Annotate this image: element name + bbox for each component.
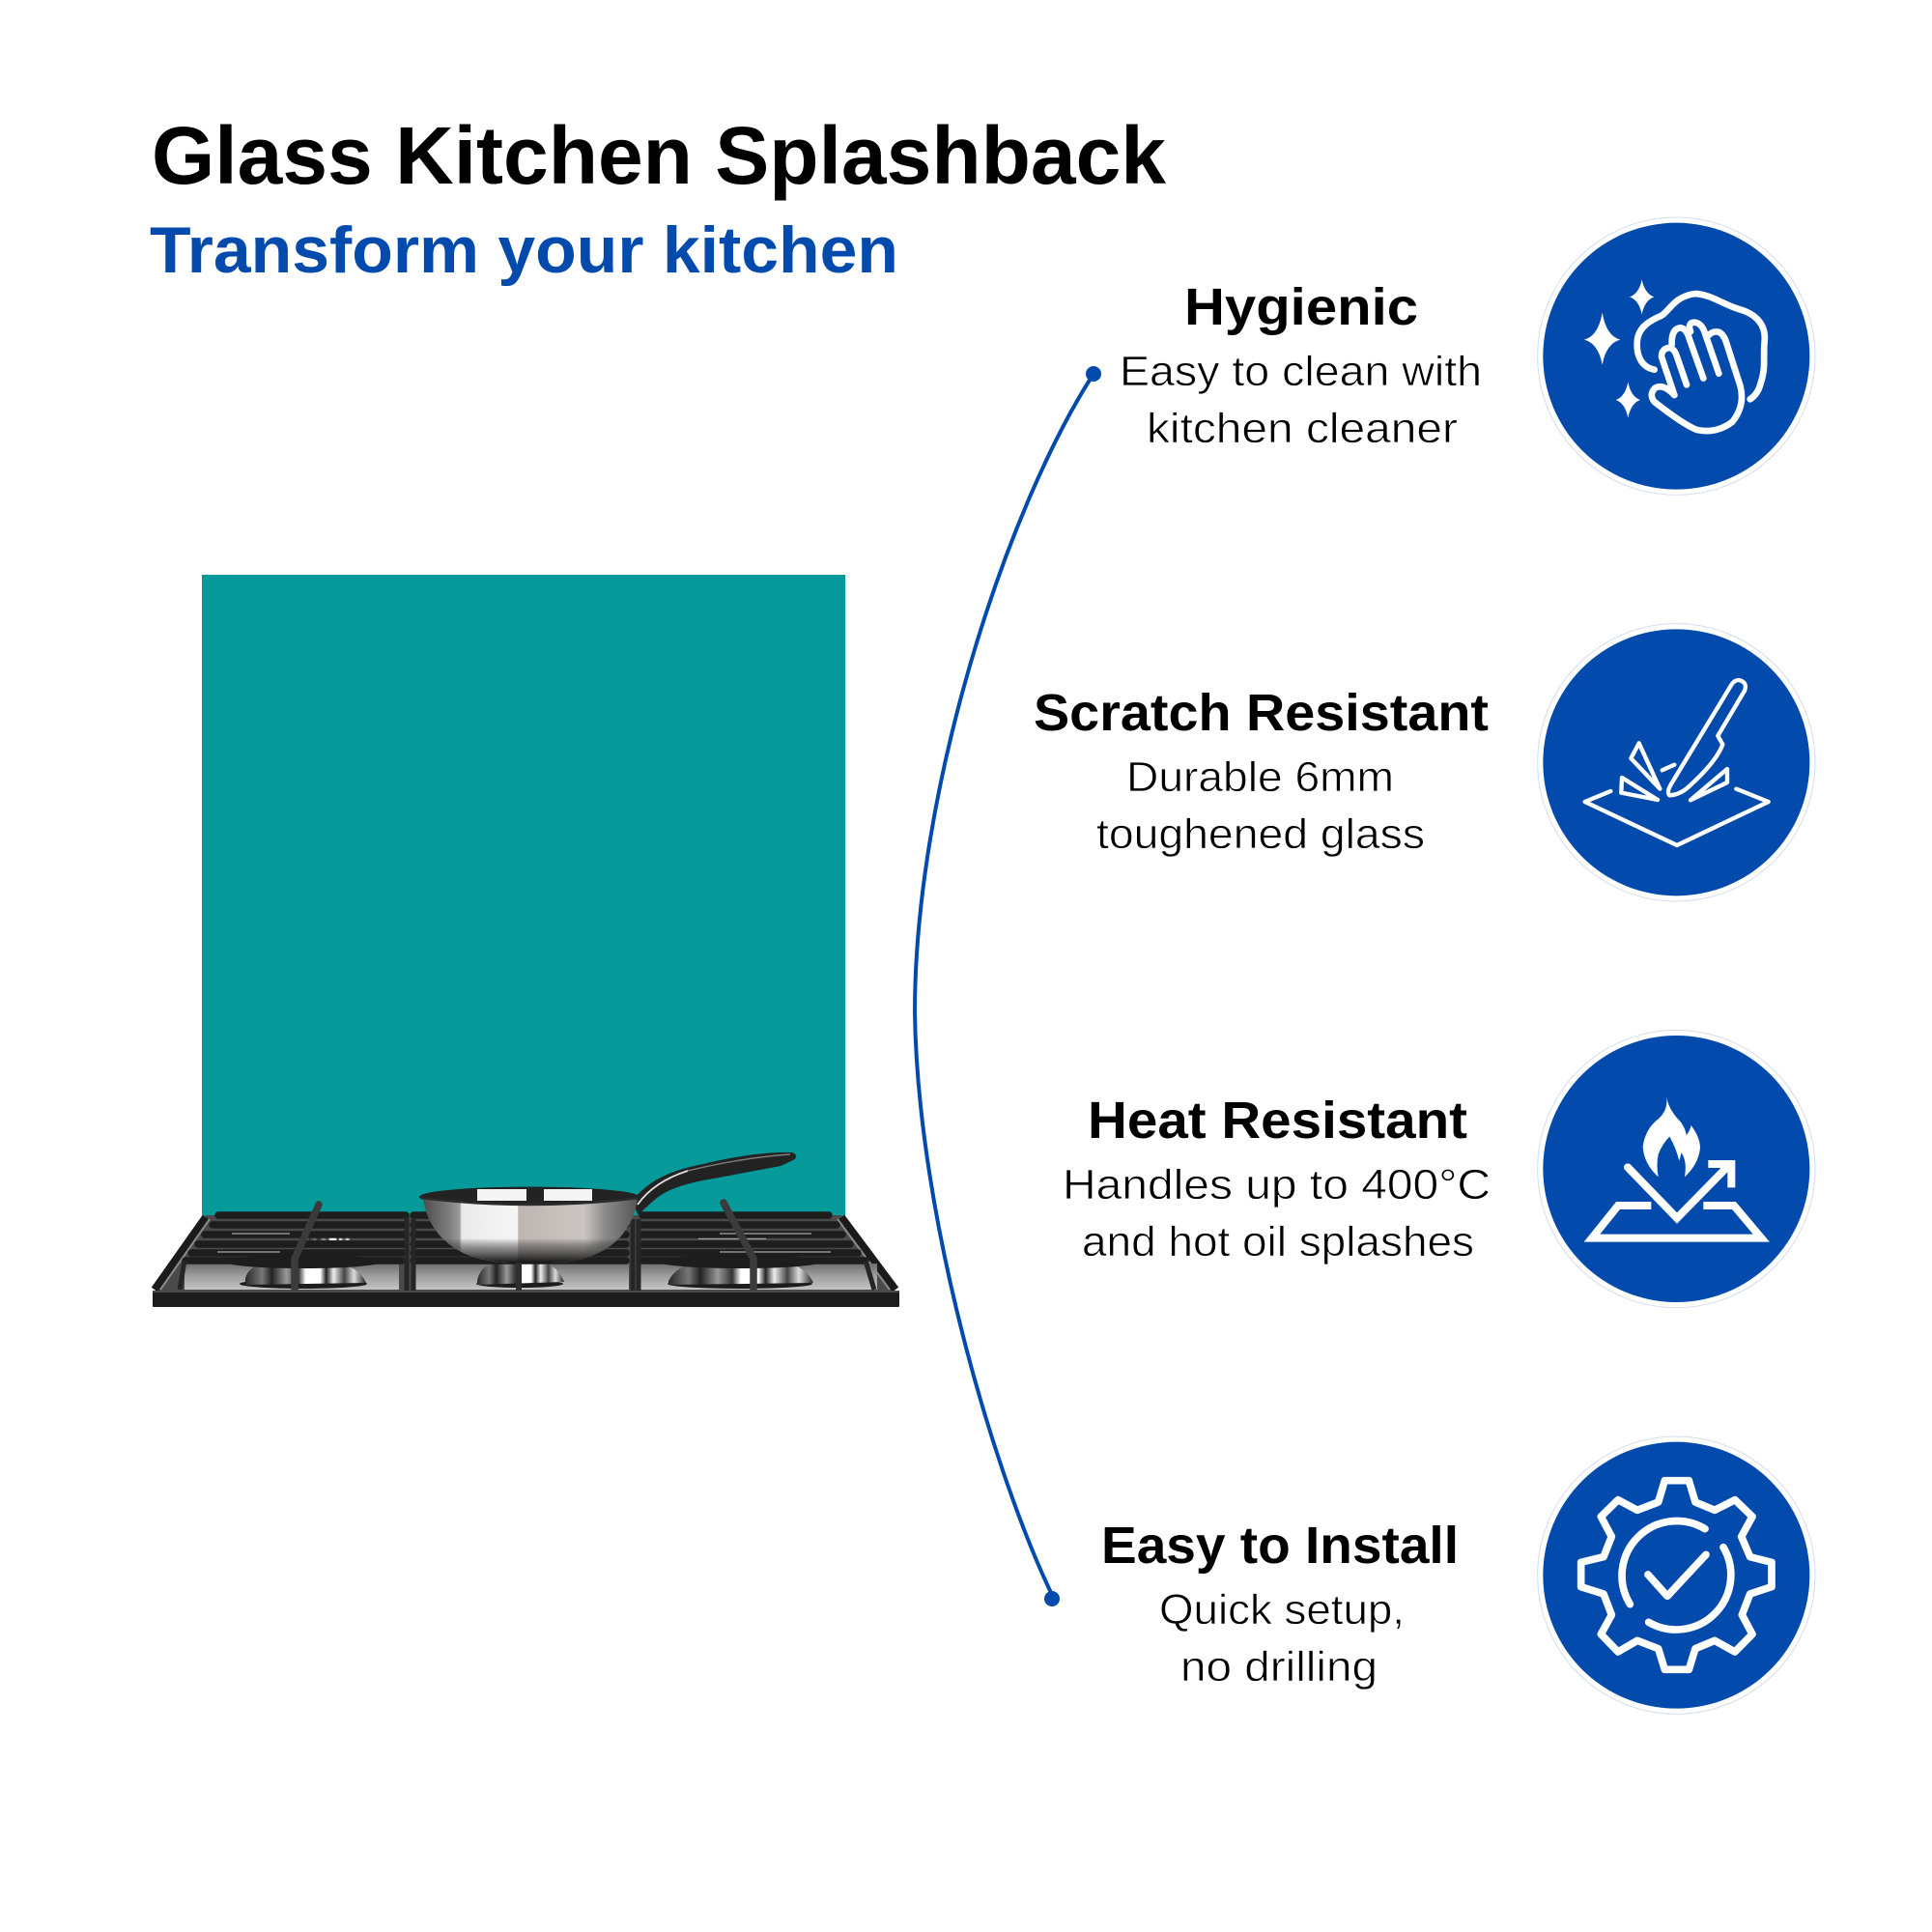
feature text: Easy to Install bbox=[1101, 1517, 1459, 1690]
feature text: Easy to Install: Easy to Install bbox=[1101, 1517, 1459, 1575]
icon: knife scratching glass bbox=[1538, 624, 1815, 901]
icon: flame on heat-reflecting surface bbox=[1538, 1030, 1815, 1308]
frying pan bbox=[419, 1152, 796, 1263]
feature text: Heat Resistant: and hot oil splashes bbox=[1082, 1218, 1474, 1265]
title: Glass Kitchen Splashback bbox=[152, 110, 1166, 201]
teal glass splashback panel bbox=[202, 575, 845, 1218]
feature text: Scratch Resistant: toughened glass bbox=[1096, 810, 1425, 858]
product illustration: splashback and hob bbox=[153, 575, 899, 1307]
icon: hand wiping with sparkles bbox=[1538, 217, 1815, 495]
feature text: Scratch Resistant: Scratch Resistant bbox=[1034, 684, 1489, 742]
feature text: Hygienic: Easy to clean with bbox=[1120, 348, 1482, 395]
grates bbox=[224, 1255, 383, 1268]
feature text: Easy to Install: no drilling bbox=[1180, 1643, 1378, 1690]
front burners bbox=[240, 1279, 367, 1289]
feature text: Hygienic: Hygienic bbox=[1184, 278, 1418, 336]
icon: gear with checkmark bbox=[1538, 1436, 1815, 1714]
feature text: Scratch Resistant: Durable 6mm bbox=[1126, 753, 1394, 801]
feature text: Heat Resistant: Handles up to 400°C bbox=[1063, 1161, 1491, 1208]
gas hob bbox=[153, 1203, 899, 1307]
feature text: Heat Resistant bbox=[1063, 1092, 1491, 1265]
feature text: Heat Resistant: Heat Resistant bbox=[1088, 1092, 1467, 1150]
rear burners bbox=[309, 1232, 352, 1240]
connector curve with end dots bbox=[915, 366, 1101, 1606]
feature text: Easy to Install: Quick setup, bbox=[1159, 1586, 1405, 1634]
feature text: Hygienic bbox=[1120, 278, 1482, 452]
subtitle: Transform your kitchen bbox=[150, 213, 898, 287]
feature text: Hygienic: kitchen cleaner bbox=[1147, 405, 1458, 452]
feature text: Scratch Resistant bbox=[1034, 684, 1489, 858]
